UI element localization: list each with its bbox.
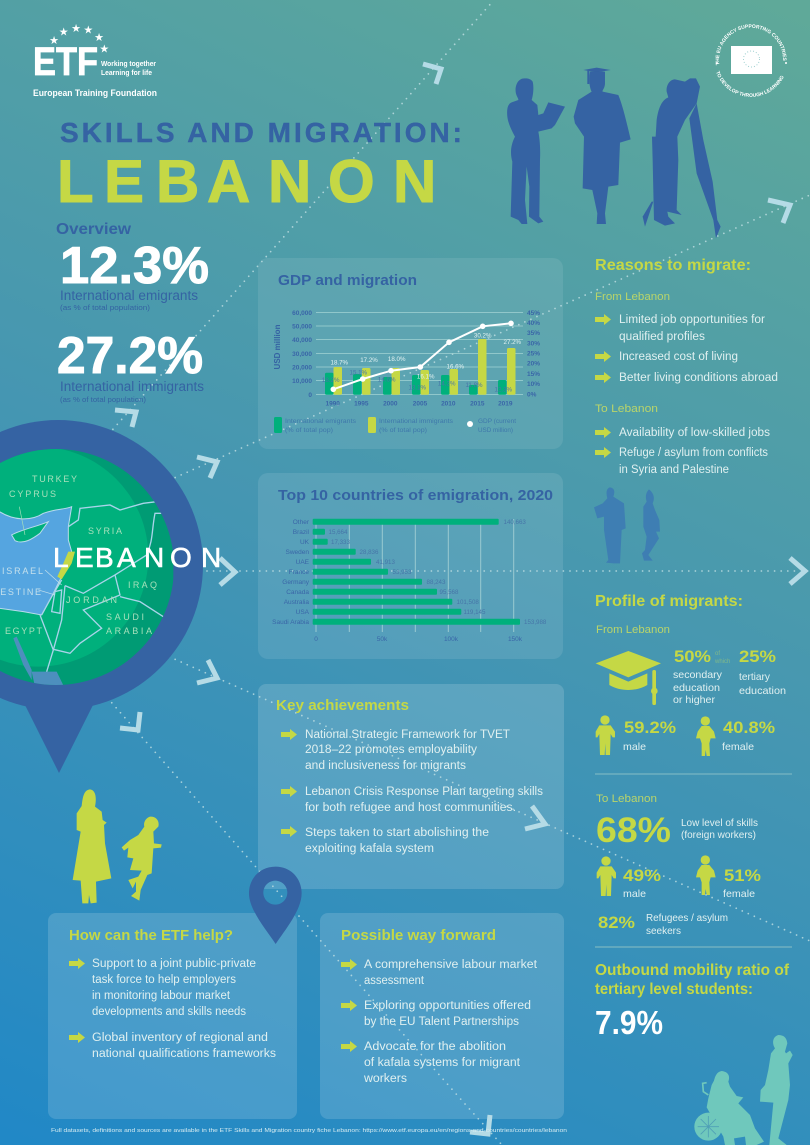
chart: GDP and migration combo chart: 18.7% xyxy=(331,359,349,366)
legend: International emigrants xyxy=(285,418,357,425)
chart: emigration bar chart: 100k xyxy=(444,636,459,643)
pin shape xyxy=(0,420,203,773)
legend: (% of total pop) xyxy=(285,427,333,434)
chart: GDP and migration combo chart: 10,000 xyxy=(292,378,312,385)
panel: key achievements: 2018–22 promotes employability xyxy=(305,744,477,756)
map labels: ISRAEL xyxy=(2,566,44,576)
logo: ETF: ★ xyxy=(94,31,104,44)
panel: key achievements: Lebanon Crisis Response Plan targeting skills xyxy=(305,786,543,798)
text block: profile of migrants: 40.8% xyxy=(723,718,775,737)
title: SKILLS AND MIGRATION: xyxy=(60,117,462,148)
chart: GDP and migration combo chart: 1995 xyxy=(354,401,369,408)
chart: emigration bar chart: UK xyxy=(300,539,310,546)
icon: female xyxy=(696,716,716,756)
chart: emigration bar chart: Other xyxy=(293,519,310,526)
panel: key achievements: Steps taken to start abolishing the xyxy=(305,827,489,839)
map regions xyxy=(0,440,173,693)
text block: reasons to migrate: Better living conditions abroad xyxy=(619,372,778,384)
text block: overview: (as % of total population) xyxy=(60,303,150,312)
chart: GDP and migration combo chart: 15% xyxy=(527,371,540,378)
arrows: chevrons along the lines xyxy=(115,64,805,1134)
logo: ETF: ★ xyxy=(71,22,81,35)
text block: outbound mobility: Outbound mobility ratio of xyxy=(595,962,790,979)
chart: emigration bar chart: Australia xyxy=(284,599,309,606)
text block: profile of migrants: male xyxy=(623,741,646,753)
chart: GDP and migration combo chart: 2015 xyxy=(470,401,485,408)
chart: emigration bar chart: 95,568 xyxy=(440,589,459,596)
chart: GDP and migration combo chart: 40% xyxy=(527,320,540,327)
text block: reasons to migrate: To Lebanon xyxy=(595,403,658,415)
text block: profile of migrants: 49% xyxy=(623,866,661,885)
chart: emigration bar chart: 15,664 xyxy=(328,529,348,536)
text block: profile of migrants xyxy=(595,593,792,947)
logo: ETF: ★ xyxy=(99,42,109,56)
panel: possible way forward: of kafala systems for migrant xyxy=(364,1057,521,1069)
panel: top 10 countries of emigration xyxy=(272,487,553,643)
text block: reasons to migrate xyxy=(595,257,778,476)
text block: overview: International immigrants xyxy=(60,379,204,394)
map labels: JORDAN xyxy=(66,595,118,605)
text block: profile of migrants: 59.2% xyxy=(624,718,676,737)
logo: ETF: European Training Foundation xyxy=(33,88,157,99)
text block: outbound mobility: tertiary level students: xyxy=(595,981,753,998)
chart: emigration bar chart: 88,243 xyxy=(426,579,446,586)
panel: possible way forward: workers xyxy=(363,1073,407,1085)
map labels: CYPRUS xyxy=(9,489,57,499)
logo: ETF xyxy=(33,22,157,99)
text block: reasons to migrate: Increased cost of living xyxy=(619,351,738,363)
chart: GDP and migration combo chart: 30,000 xyxy=(292,351,312,358)
text block: reasons to migrate: qualified profiles xyxy=(619,331,705,343)
chart: emigration bar chart: 53,953 xyxy=(392,569,412,576)
text block: reasons to migrate: Limited job opportunities for xyxy=(619,314,765,326)
panel: ETF help background xyxy=(48,913,297,1119)
panel: how can the ETF help xyxy=(69,927,276,1060)
chart: GDP and migration combo chart: 16.1% xyxy=(417,374,435,381)
illustration: small migrant silhouettes xyxy=(594,487,660,563)
chart: GDP and migration combo chart: 2005 xyxy=(413,401,428,408)
logo: ETF: Learning for life xyxy=(101,68,152,77)
panel: GDP and migration xyxy=(273,272,540,434)
chart: GDP and migration combo chart: 18.0% xyxy=(388,356,406,363)
text block: overview: 27.2% xyxy=(57,327,203,385)
chart: GDP and migration combo chart: 30.2% xyxy=(474,332,492,339)
text block: profile of migrants: female xyxy=(722,741,754,753)
map labels: SAUDI xyxy=(106,612,145,622)
chart: GDP and migration combo chart: 12.3% xyxy=(495,386,513,393)
panel: key achievements: exploiting kafala system xyxy=(305,843,434,855)
chart: emigration bar chart: Canada xyxy=(286,589,309,596)
map labels: TURKEY xyxy=(32,474,78,484)
text block: profile of migrants: Profile of migrants: xyxy=(595,593,743,610)
badge: EU agency: THE EU AGENCY SUPPORTING COUNTRIES xyxy=(716,24,786,66)
map labels xyxy=(0,474,158,636)
chart: GDP and migration combo chart: 10% xyxy=(527,381,540,388)
panel: possible way forward: assessment xyxy=(364,975,425,987)
panel: how can the ETF help: developments and skills needs xyxy=(92,1006,246,1018)
logo: ETF: Working together xyxy=(101,59,156,68)
map: pin with Lebanon and neighbours xyxy=(0,420,221,773)
text block: reasons to migrate: Availability of low-skilled jobs xyxy=(619,427,770,439)
text block: profile of migrants: From Lebanon xyxy=(596,624,670,636)
chart: GDP and migration combo chart: 2000 xyxy=(383,401,398,408)
chart: emigration bar chart: Brazil xyxy=(293,529,310,536)
chart: emigration bar chart: 153,988 xyxy=(524,619,547,626)
chart: emigration bar chart: 17,333 xyxy=(331,539,350,546)
legend xyxy=(274,417,516,434)
icon: male to Lebanon xyxy=(597,856,616,896)
chart: GDP and migration combo chart: 2019 xyxy=(498,401,513,408)
text block: outbound mobility xyxy=(595,962,790,1041)
text block: profile of migrants: male xyxy=(623,888,646,900)
heading: top 10 countries: Top 10 countries of emigration, 2020 xyxy=(278,487,553,504)
chart: GDP and migration combo chart: 14.6% xyxy=(378,376,396,383)
chart: emigration bar chart: 101,508 xyxy=(456,599,479,606)
panel: how can the ETF help: task force to help employers xyxy=(92,974,236,986)
chart: GDP and migration combo chart: 15.1% xyxy=(350,369,368,376)
chart: GDP and migration combo chart: 1990 xyxy=(325,401,340,408)
text block: profile of migrants: 51% xyxy=(724,866,761,885)
legend: (% of total pop) xyxy=(379,427,427,434)
logo: ETF: ETF xyxy=(33,40,98,84)
label: Lebanon: LEBANON xyxy=(53,542,221,573)
panel: possible way forward: by the EU Talent Partnerships xyxy=(364,1016,519,1028)
chart: emigration bar chart: 41,913 xyxy=(376,559,395,566)
icon: female to Lebanon xyxy=(696,855,716,895)
chart: GDP and migration combo chart: 25% xyxy=(527,350,540,358)
footer: source note: Full datasets, definitions and sources are available in the ETF Skills and Migration country fiche Lebanon: https://www.etf.europa.eu/en/regions-and-countries/countries/lebanon xyxy=(51,1128,567,1134)
chart: GDP and migration combo chart: 13.1% xyxy=(409,385,427,392)
map labels: ARABIA xyxy=(106,626,153,636)
chart: GDP and migration combo chart: USD million xyxy=(273,324,282,369)
heading: GDP and migration: GDP and migration xyxy=(278,272,417,289)
text block: profile of migrants: 50% xyxy=(674,647,711,666)
text block: reasons to migrate: Refuge / asylum from conflicts xyxy=(619,447,768,459)
chart: emigration bar chart: 150k xyxy=(508,636,523,643)
panel: possible way forward xyxy=(341,927,538,1085)
text block: outbound mobility: 7.9% xyxy=(595,1004,663,1041)
panel: possible way forward: Exploring opportunities offered xyxy=(364,1000,531,1012)
chart: emigration bar chart: Germany xyxy=(282,579,310,586)
map labels: EGYPT xyxy=(5,626,43,636)
legend: USD million) xyxy=(478,427,513,434)
illustration: wheelchair user and woman xyxy=(694,1035,793,1145)
icon: graduation cap xyxy=(596,651,661,705)
chart: emigration bar chart: 0 xyxy=(314,636,318,643)
text block: reasons to migrate: in Syria and Palestine xyxy=(619,464,729,476)
chart: GDP and migration combo chart: 2010 xyxy=(441,401,456,408)
text block: overview: International emigrants xyxy=(60,288,198,303)
panel: how can the ETF help: national qualifications frameworks xyxy=(92,1048,276,1060)
panel: key achievements: for both refugee and host communities. xyxy=(305,802,516,814)
text block: profile of migrants: which xyxy=(714,659,730,665)
panel: key achievements: and inclusiveness for migrants xyxy=(305,760,466,772)
panel: key achievements: National Strategic Framework for TVET xyxy=(305,729,510,741)
panel: key achievements background xyxy=(258,684,564,889)
logo: ETF: ★ xyxy=(83,24,93,36)
panel: possible way forward: A comprehensive labour market xyxy=(364,959,538,971)
text block: profile of migrants: tertiary xyxy=(739,671,771,683)
chart: GDP and migration combo chart: 17.2% xyxy=(360,357,378,364)
icon: male xyxy=(596,715,615,755)
text block: overview: 12.3% xyxy=(60,237,209,295)
text block: profile of migrants: seekers xyxy=(646,926,681,937)
chart: GDP and migration combo chart: 35% xyxy=(527,330,540,337)
text block: profile of migrants: 82% xyxy=(598,913,635,932)
text block: reasons to migrate: From Lebanon xyxy=(595,291,670,303)
chart: emigration bar chart: Sweden xyxy=(286,549,309,556)
text block: profile of migrants: 68% xyxy=(596,811,671,850)
panel: possible way forward: Advocate for the abolition xyxy=(364,1041,506,1053)
chart: emigration bar chart xyxy=(272,519,547,643)
chart: GDP and migration combo chart: 0% xyxy=(527,392,537,398)
panel: key achievements: Key achievements xyxy=(276,697,409,714)
chart: GDP and migration combo chart: 20,000 xyxy=(292,364,312,372)
chart: GDP and migration combo chart: 60,000 xyxy=(292,310,312,317)
text block: profile of migrants: education xyxy=(739,685,786,697)
chart: GDP and migration combo chart: 45% xyxy=(527,310,540,317)
text block: profile of migrants: (foreign workers) xyxy=(681,830,756,841)
chart: GDP and migration combo chart: 40,000 xyxy=(292,337,312,344)
panel: possible way forward: Possible way forward xyxy=(341,927,496,944)
chart: emigration bar chart: France xyxy=(289,569,309,576)
chart: GDP and migration combo chart: 11.8% xyxy=(465,382,483,389)
legend: GDP (current xyxy=(478,418,516,425)
text block: profile of migrants: Refugees / asylum xyxy=(646,913,728,924)
title: LEBANON xyxy=(57,148,436,215)
icon: location pin xyxy=(249,867,302,944)
panel: key achievements xyxy=(276,697,543,855)
panel: how can the ETF help: How can the ETF help? xyxy=(69,927,233,944)
text block: profile of migrants: female xyxy=(723,888,755,900)
legend: International immigrants xyxy=(379,418,454,425)
chart: emigration bar chart: 140,663 xyxy=(504,519,526,526)
illustration: professionals silhouettes xyxy=(507,68,721,238)
chart: GDP and migration combo chart xyxy=(273,310,540,408)
chart: emigration bar chart: UAE xyxy=(296,559,310,566)
badge: EU agency: TO DEVELOP THROUGH LEARNING xyxy=(716,70,784,97)
chart: emigration bar chart: Saudi Arabia xyxy=(272,619,309,626)
illustration: woman and child silhouettes xyxy=(73,789,162,903)
panel: how can the ETF help: Global inventory of regional and xyxy=(92,1032,268,1044)
text block: overview xyxy=(56,221,209,404)
text block: profile of migrants: or higher xyxy=(673,694,715,706)
panel: top 10 background xyxy=(258,473,563,659)
chart: GDP and migration combo chart: 20% xyxy=(527,360,540,368)
panel: GDP background xyxy=(258,258,563,449)
panel: way forward background xyxy=(320,913,564,1119)
text block: profile of migrants: To Lebanon xyxy=(596,793,657,805)
logo: ETF: ★ xyxy=(59,26,69,38)
text block: profile of migrants: Low level of skills xyxy=(681,818,758,829)
text block: profile of migrants: education xyxy=(673,682,720,694)
text block: profile of migrants: 25% xyxy=(739,647,776,666)
map labels: IRAQ xyxy=(128,580,158,590)
map labels: SYRIA xyxy=(88,526,123,536)
title xyxy=(57,117,462,215)
text block: reasons to migrate: Reasons to migrate: xyxy=(595,257,751,274)
chart: emigration bar chart: USA xyxy=(296,609,310,616)
logo: ETF: ★ xyxy=(49,34,59,47)
chart: GDP and migration combo chart: 16.6% xyxy=(447,364,465,371)
chart: GDP and migration combo chart: 0 xyxy=(308,392,312,399)
text block: profile of migrants: of xyxy=(715,651,720,657)
chart: GDP and migration combo chart: 30% xyxy=(527,340,540,348)
text block: profile of migrants: secondary xyxy=(673,669,723,681)
panel: how can the ETF help: in monitoring labour market xyxy=(92,990,231,1002)
chart: emigration bar chart: 119,145 xyxy=(464,609,486,616)
text block: overview: Overview xyxy=(56,221,132,238)
chart: GDP and migration combo chart: 14.2% xyxy=(438,380,456,387)
text block: overview: (as % of total population) xyxy=(60,395,146,404)
panel: how can the ETF help: Support to a joint public-private xyxy=(92,958,256,970)
badge: EU agency xyxy=(716,24,787,97)
chart: GDP and migration combo chart: 18.2% xyxy=(322,377,340,384)
chart: emigration bar chart: 28,836 xyxy=(360,549,379,556)
chart: GDP and migration combo chart: 27.2% xyxy=(504,339,522,346)
chart: GDP and migration combo chart: 50,000 xyxy=(292,324,312,330)
chart: emigration bar chart: 50k xyxy=(377,636,388,643)
